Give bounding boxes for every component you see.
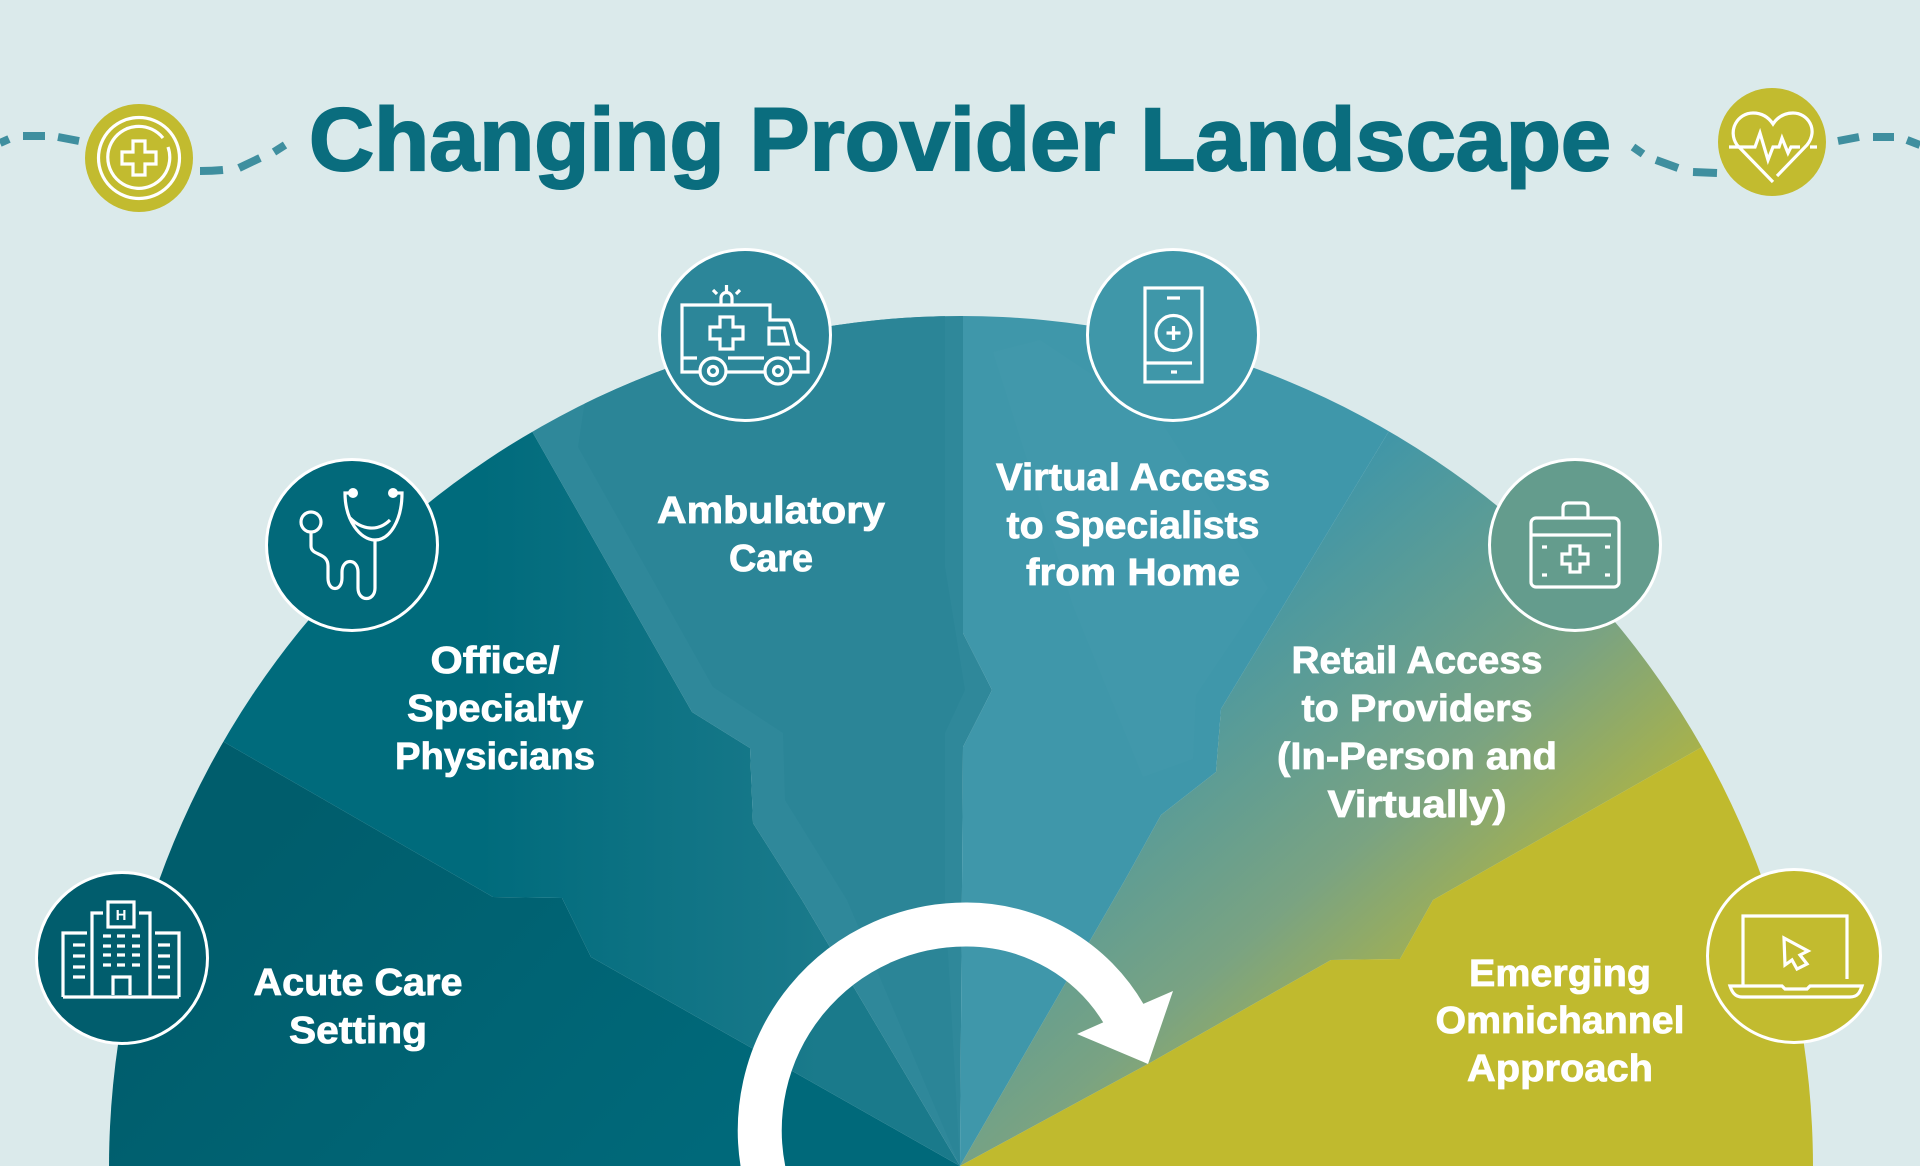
icon: smartphone: [1088, 250, 1258, 420]
icon: stethoscope: [266, 460, 438, 630]
label: virtual access: Virtual Access: [996, 457, 1270, 499]
segment: virtual access inner highlight: [993, 340, 1268, 777]
label: virtual access: to Specialists: [1006, 505, 1260, 547]
label: acute care setting: Setting: [289, 1010, 427, 1052]
label: retail access: Retail Access: [1292, 640, 1542, 682]
label: emerging omnichannel approach: Approach: [1467, 1048, 1653, 1090]
label: office specialty physicians: [395, 640, 595, 778]
label: office specialty physicians: Office/: [430, 640, 560, 682]
icon: laptop with cursor: [1708, 870, 1880, 1042]
segment: ambulatory care: [532, 316, 992, 1166]
label: virtual access: [996, 457, 1270, 594]
segment: virtual access: [960, 316, 1389, 1166]
label: emerging omnichannel approach: [1436, 953, 1684, 1090]
icon: acute care hospital: [36, 872, 208, 1044]
icon: first aid kit: [1490, 460, 1660, 630]
label: office specialty physicians: Physicians: [395, 736, 595, 778]
title: Changing Provider Landscape: [309, 89, 1611, 189]
icon: ambulance: [660, 250, 830, 420]
label: acute care setting: [254, 962, 462, 1052]
label: office specialty physicians: Specialty: [407, 688, 583, 730]
label: retail access: (In-Person and: [1277, 736, 1557, 778]
segment: retail access: [960, 431, 1702, 1166]
label: ambulatory care: [657, 490, 885, 580]
dashed line: right: [1633, 137, 1920, 173]
rotating arrow: [760, 924, 1173, 1166]
label: retail access: Virtually): [1328, 784, 1506, 826]
dashed line: left: [0, 136, 285, 171]
label: retail access: to Providers: [1302, 688, 1532, 730]
icon: acute care hospital: H: [116, 907, 126, 924]
segment: emerging omnichannel: [960, 747, 1813, 1166]
label: emerging omnichannel approach: Omnichannel: [1436, 1000, 1684, 1042]
segment: ambulatory inner shade: [578, 300, 965, 1166]
badge: medical cross seal: [85, 104, 193, 212]
label: emerging omnichannel approach: Emerging: [1469, 953, 1651, 995]
badge: heart with pulse: [1718, 88, 1826, 196]
label: ambulatory care: Care: [729, 538, 813, 580]
segment: office and specialty physicians: [224, 432, 960, 1166]
label: virtual access: from Home: [1026, 552, 1240, 594]
label: retail access: [1277, 640, 1557, 826]
fan chart: six care settings: [109, 316, 1813, 1166]
label: acute care setting: Acute Care: [254, 962, 462, 1004]
label: ambulatory care: Ambulatory: [657, 490, 885, 532]
segment: acute care: [109, 742, 960, 1166]
